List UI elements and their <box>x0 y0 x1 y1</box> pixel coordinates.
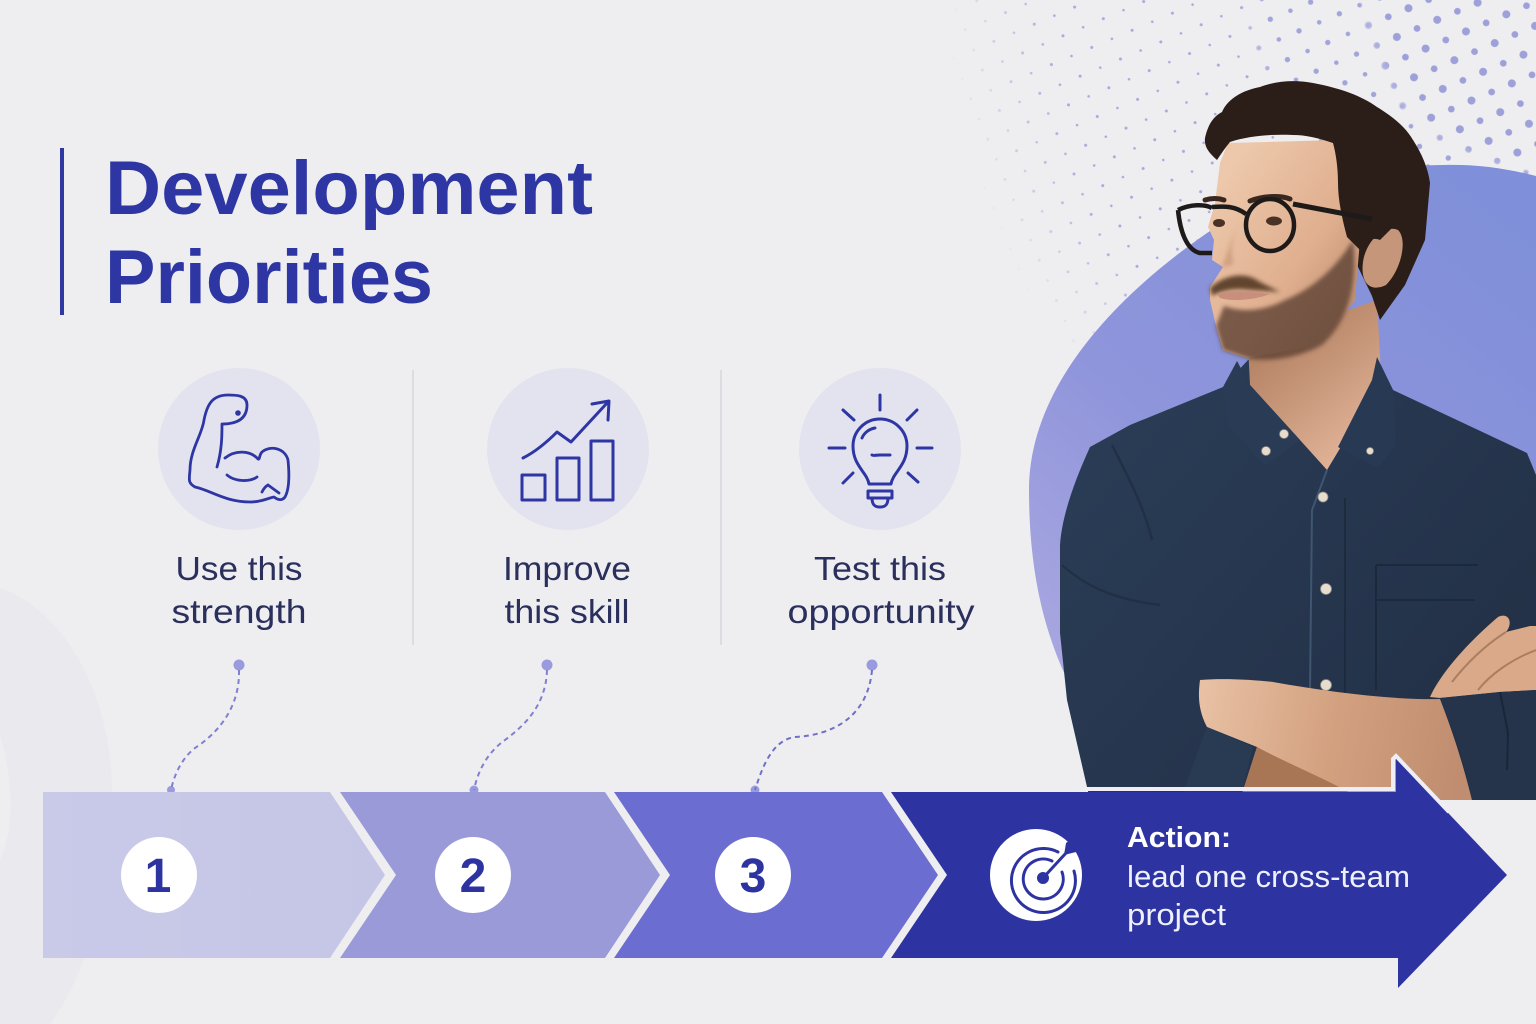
icon: light bulb <box>799 368 961 530</box>
number 1 <box>121 837 197 913</box>
panel: improve this skill <box>487 368 649 630</box>
eyes <box>1213 216 1282 227</box>
number 1: 1 <box>145 850 171 903</box>
panel: use this strength <box>158 368 320 630</box>
right sleeve cuff <box>1440 690 1536 800</box>
neck <box>1248 300 1382 470</box>
icon: flexed arm <box>158 368 320 530</box>
beard <box>1216 240 1354 360</box>
label: strength <box>172 593 306 630</box>
icon: target <box>990 829 1082 921</box>
label: Improve <box>503 550 631 587</box>
label: this skill <box>504 593 630 630</box>
chevron 1 <box>43 792 385 958</box>
person portrait <box>1060 81 1536 800</box>
label: Test this <box>814 550 946 587</box>
hair back <box>1330 120 1430 320</box>
title heading: Priorities <box>105 235 433 320</box>
chevron process bar <box>43 756 1507 988</box>
number 3 <box>715 837 791 913</box>
glasses <box>1178 199 1372 253</box>
shadow under forearm <box>1240 747 1362 800</box>
number 3: 3 <box>740 850 766 903</box>
panel: test this opportunity <box>788 368 975 630</box>
moustache <box>1210 275 1280 296</box>
action text: lead one cross-team <box>1127 859 1410 894</box>
dashed connector 3 <box>750 660 878 794</box>
label: Use this <box>176 550 302 587</box>
icon: growth chart <box>487 368 649 530</box>
dashed connector 1 <box>167 660 244 794</box>
column dividers <box>412 370 722 645</box>
blue backdrop circle <box>1029 165 1536 790</box>
face <box>1208 140 1360 358</box>
title block <box>60 146 593 320</box>
left sleeve cuff <box>1180 727 1253 800</box>
chevron 2 <box>340 792 660 958</box>
shirt body <box>1060 357 1536 800</box>
decorative ring bottom left <box>0 588 112 1024</box>
title rule <box>60 148 64 315</box>
ear <box>1363 229 1403 288</box>
eyebrows <box>1205 197 1290 201</box>
cuff fold <box>1500 692 1508 770</box>
shirt collar <box>1223 357 1396 468</box>
title heading: Development <box>105 146 593 231</box>
action text: Action: <box>1127 822 1231 854</box>
hand and fingers <box>1430 616 1536 698</box>
nose shading <box>1222 222 1238 268</box>
halftone dots <box>964 0 1536 342</box>
number 2: 2 <box>460 850 486 903</box>
label: opportunity <box>788 593 975 630</box>
lips <box>1217 291 1270 300</box>
shirt buttons <box>1262 430 1374 690</box>
crossed forearm <box>1199 679 1472 800</box>
hair front <box>1205 81 1430 252</box>
chevron 4: action arrow <box>891 758 1507 988</box>
dashed connector 2 <box>470 660 552 794</box>
shirt placket and pocket <box>1062 445 1478 695</box>
arrow highlight <box>1086 756 1449 812</box>
action text: project <box>1127 897 1226 932</box>
number 2 <box>435 837 511 913</box>
chevron 3 <box>614 792 938 958</box>
